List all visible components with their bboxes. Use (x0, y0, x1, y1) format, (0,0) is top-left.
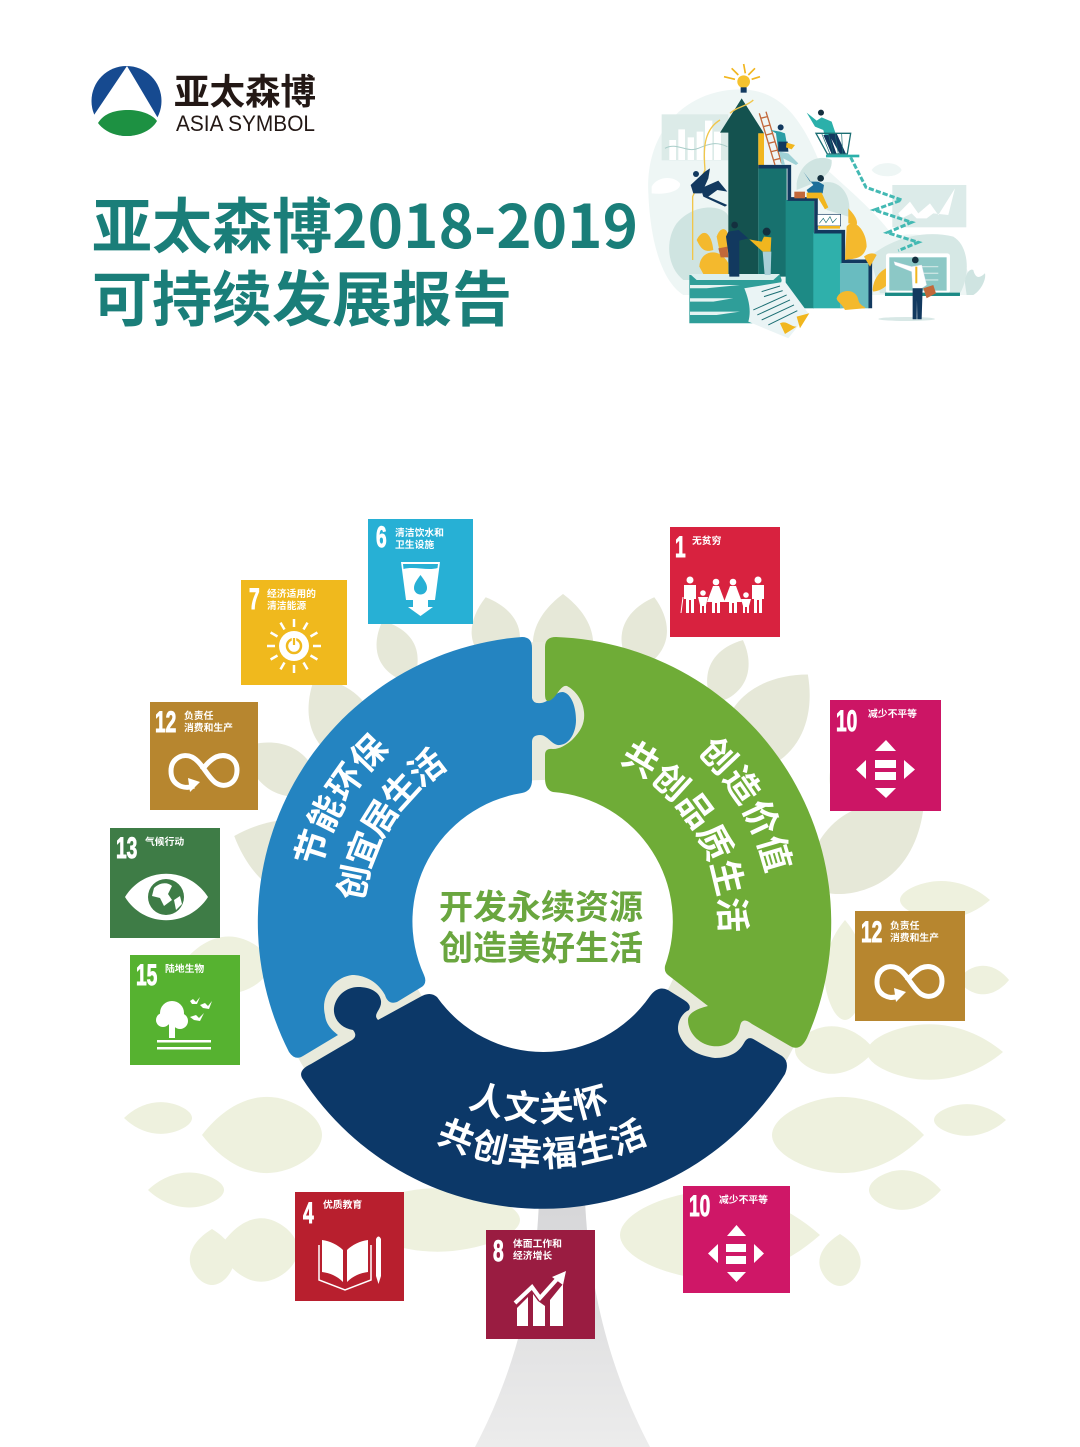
SDG tile 15: life on land: 15 (136, 959, 157, 992)
light bulb (724, 64, 760, 93)
SDG tile 10: reduced inequalities (right): 减少不平等 (868, 706, 917, 720)
icon: inequality arrows (856, 740, 915, 798)
panel: navy segment (301, 987, 787, 1209)
background: tree leaves upper (221, 591, 946, 921)
logo english name: ASIA SYMBOL (176, 111, 315, 136)
man on balcony (807, 110, 859, 157)
SDG tile 12: responsible consumption (right): 消费和生产 (890, 930, 939, 944)
woman on ladder (771, 124, 798, 165)
background: tree leaves lower (124, 881, 1009, 1286)
SDG tile 4: quality education (295, 1192, 404, 1301)
inner white circle (404, 783, 682, 1061)
navy puzzle piece (301, 987, 787, 1209)
panel: blue segment (258, 637, 576, 1058)
SDG tile 7: clean energy: 经济适用的 (267, 586, 316, 600)
SDG tile 12: responsible consumption (left): 消费和生产 (184, 720, 233, 734)
logo mark (92, 66, 162, 136)
panel: green segment (545, 637, 832, 1048)
businessman handshake (718, 222, 748, 277)
SDG tile 12: responsible consumption (left): 12 (155, 706, 176, 739)
SDG tile 4: quality education: 4 (303, 1197, 314, 1230)
icon: inequality arrows (708, 1225, 764, 1282)
blue puzzle piece (258, 637, 576, 1058)
SDG tile 12: responsible consumption (right) (855, 911, 965, 1021)
SDG tile 12: responsible consumption (left): 负责任 (184, 708, 214, 722)
SDG tile 6: clean water: 卫生设施 (395, 537, 434, 551)
icon: growth chart (515, 1271, 566, 1326)
center slogan (439, 880, 643, 970)
blue label: 节能环保 (293, 732, 389, 861)
SDG tile 6: clean water (368, 519, 473, 624)
SDG tile 10: reduced inequalities (bottom) (683, 1186, 790, 1293)
small plant (965, 270, 985, 295)
SDG tile 10: reduced inequalities (bottom): 减少不平等 (719, 1192, 768, 1206)
SDG tile 15: life on land: 陆地生物 (165, 961, 204, 975)
SDG tile 8: decent work (486, 1230, 595, 1339)
illustration: teamwork climbing growth arrow (648, 64, 985, 338)
icon: family (681, 576, 764, 613)
title: 亚太森博2018-2019 (92, 179, 638, 266)
SDG tile 10: reduced inequalities (right): 10 (836, 705, 857, 738)
logo wordmark: 亚太森博 (174, 64, 316, 115)
green label: 创造价值 (700, 738, 794, 874)
green label: 共创品质生活 (620, 740, 750, 931)
background: tree trunk (475, 1200, 650, 1447)
SDG tile 10: reduced inequalities (right) (830, 700, 941, 811)
growth arrow (720, 98, 764, 275)
orange plants (697, 208, 948, 310)
SDG tile 1: no poverty: 1 (675, 531, 686, 564)
icon: tree and birds (156, 997, 212, 1050)
paper stack (689, 274, 782, 323)
SDG tile 7: clean energy (241, 580, 347, 685)
navy label: 共创幸福生活 (437, 1117, 647, 1170)
SDG tile 8: decent work: 体面工作和 (513, 1236, 562, 1250)
green puzzle piece (545, 637, 831, 1048)
SDG tile 12: responsible consumption (left) (150, 702, 258, 810)
illustration backdrop (648, 89, 973, 295)
SDG tile 4: quality education: 优质教育 (323, 1197, 362, 1211)
SDG tile 6: clean water: 清洁饮水和 (395, 525, 444, 539)
man sitting on steps (794, 172, 828, 209)
SDG tile 7: clean energy: 7 (249, 583, 260, 616)
icon: sun with power button (267, 619, 321, 673)
rope (693, 100, 753, 260)
SDG tile 1: no poverty: 无贫穷 (692, 533, 722, 547)
right chart panel (892, 185, 966, 227)
dashed zig-zag stairs (851, 157, 918, 251)
title: 可持续发展报告 (92, 252, 512, 339)
SDG tile 13: climate action: 气候行动 (145, 834, 184, 848)
SDG tile 13: climate action: 13 (116, 832, 137, 865)
SDG tile 7: clean energy: 清洁能源 (267, 598, 306, 612)
SDG tile 13: climate action (110, 828, 220, 938)
navy label: 人文关怀 (468, 1082, 608, 1125)
businesswoman handshake (749, 228, 771, 275)
icon: book and pencil (319, 1236, 381, 1290)
icon: infinity loop (171, 756, 237, 792)
blue label: 创宜居生活 (335, 746, 448, 898)
SDG tile 15: life on land (130, 955, 240, 1065)
SDG tile 8: decent work: 经济增长 (513, 1248, 552, 1262)
presenter man (878, 257, 936, 321)
center slogan: 创造美好生活 (439, 921, 643, 970)
icon: infinity loop (877, 967, 942, 1002)
icon: eye with globe (125, 874, 208, 920)
SDG tile 12: responsible consumption (right): 12 (861, 916, 882, 949)
SDG tile 6: clean water: 6 (376, 521, 387, 554)
center slogan: 开发永续资源 (439, 880, 643, 929)
title (92, 179, 638, 339)
easel chart board (817, 214, 841, 229)
left chart panel (662, 114, 728, 160)
icon: cup with drop (401, 562, 440, 616)
SDG tile 8: decent work: 8 (493, 1235, 504, 1268)
ring backing (332, 711, 754, 1133)
navy label (437, 1082, 647, 1170)
SDG tile 12: responsible consumption (right): 负责任 (890, 918, 920, 932)
SDG tile 10: reduced inequalities (bottom): 10 (689, 1190, 710, 1223)
stair steps (758, 167, 870, 308)
document (744, 282, 809, 338)
ladder (759, 112, 782, 165)
logo (92, 64, 316, 136)
laptop (885, 253, 960, 296)
climber on rope (691, 168, 727, 207)
SDG tile 1: no poverty (670, 527, 780, 637)
